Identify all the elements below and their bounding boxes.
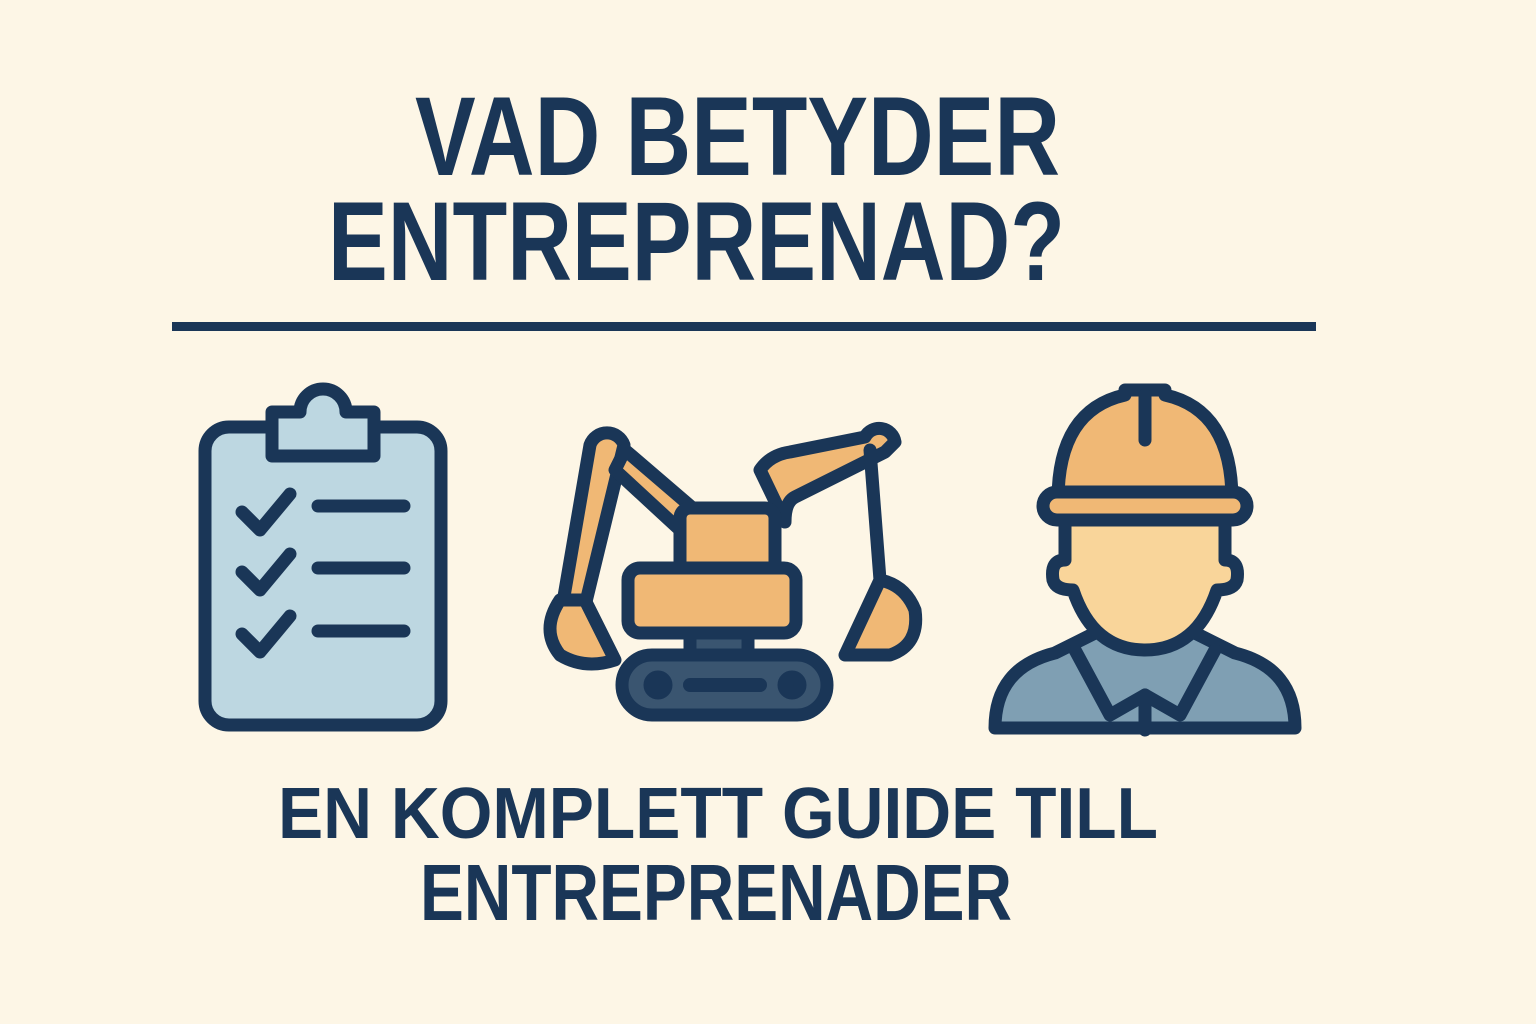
icon: excavator bbox=[550, 428, 916, 715]
subtitle bbox=[278, 774, 1158, 937]
subtitle: EN KOMPLETT GUIDE TILL bbox=[278, 774, 1158, 854]
subtitle: ENTREPRENADER bbox=[420, 848, 1012, 937]
icon: worker bbox=[995, 390, 1295, 730]
title bbox=[328, 74, 1065, 304]
icon: clipboard bbox=[205, 389, 441, 725]
title: VAD BETYDER bbox=[415, 74, 1060, 199]
title: ENTREPRENAD? bbox=[328, 179, 1065, 304]
